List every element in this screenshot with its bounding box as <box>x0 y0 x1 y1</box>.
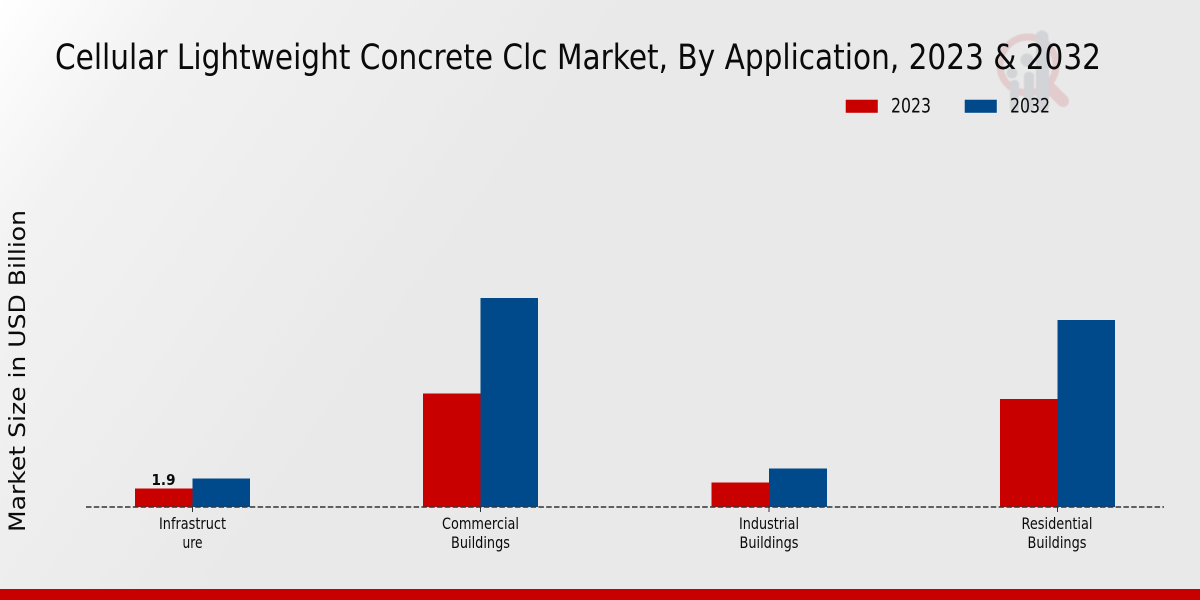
axis baseline <box>86 506 1164 508</box>
legend <box>846 95 1050 118</box>
bar group: Commercial Buildings <box>423 298 538 507</box>
legend item: 2032: 2032 <box>1010 95 1050 118</box>
footer bar <box>0 589 1200 600</box>
category label: Infrastructure <box>159 514 226 552</box>
bar chart <box>86 298 1164 512</box>
category label: Residential Buildings: Residential <box>1022 514 1092 533</box>
category label: Infrastructure: ure <box>182 533 202 552</box>
category label: Industrial Buildings <box>739 514 799 552</box>
category label: Commercial Buildings <box>442 514 519 552</box>
category label: Residential Buildings <box>1022 514 1092 552</box>
y-axis label: Market Size in USD Billion <box>5 210 31 532</box>
legend item: 2023 <box>846 95 931 118</box>
legend item: 2032 <box>964 95 1050 118</box>
legend item: 2023: 2023 <box>891 95 931 118</box>
category label: Residential Buildings: Buildings <box>1028 533 1086 552</box>
category label: Commercial Buildings: Buildings <box>451 533 510 552</box>
bar group: Infrastructure <box>135 478 250 507</box>
category label: Infrastructure: Infrastruct <box>159 514 226 533</box>
bar group: Industrial Buildings <box>712 468 827 507</box>
bar group: Residential Buildings <box>1000 320 1115 507</box>
category label: Commercial Buildings: Commercial <box>442 514 519 533</box>
icon: watermark magnifier with bars <box>1000 30 1063 112</box>
category label: Industrial Buildings: Industrial <box>739 514 799 533</box>
data label: 1.9: 1.9 <box>152 471 176 489</box>
category label: Industrial Buildings: Buildings <box>740 533 798 552</box>
